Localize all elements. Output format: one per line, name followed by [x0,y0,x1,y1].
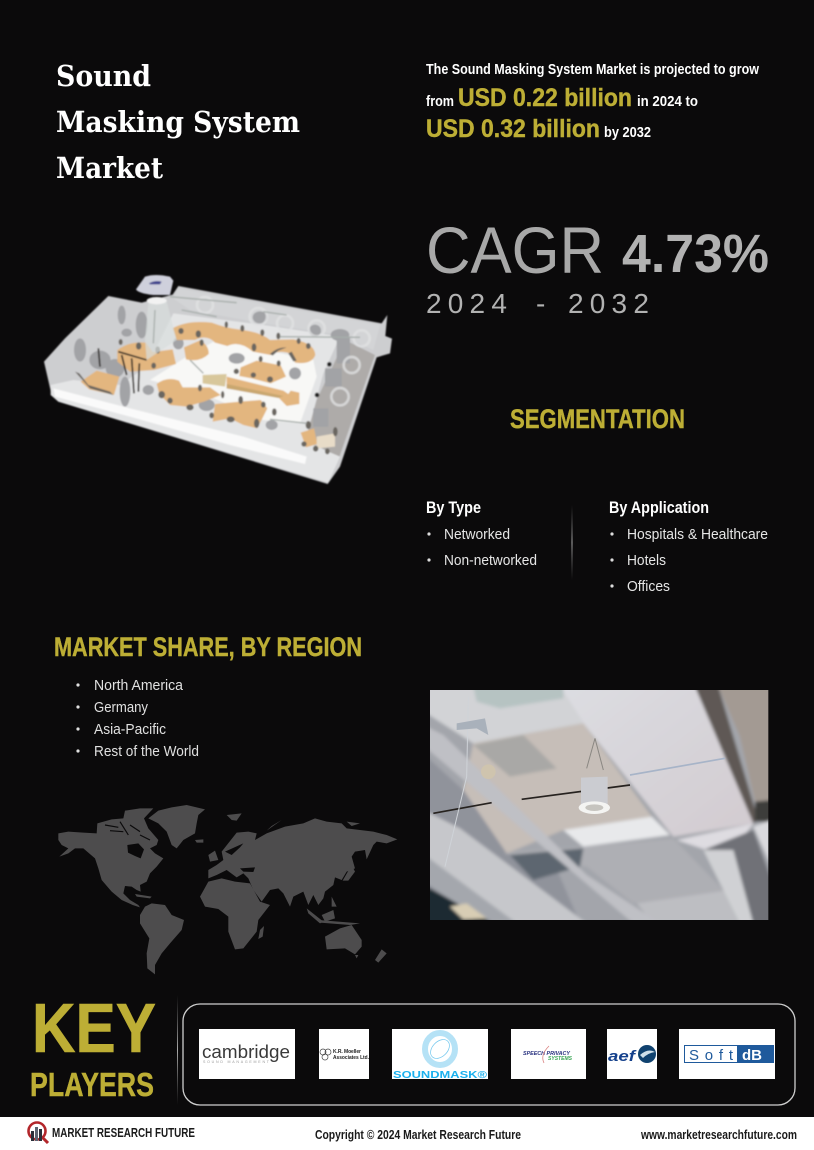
logo: soundmask [392,1029,488,1081]
logo: soft dB [679,1029,775,1079]
logo: aef: aef [608,1048,637,1065]
greenland [148,805,205,848]
walls [44,286,392,484]
logo: soft dB: Soft [689,1047,734,1064]
segment: by application: Hospitals & Healthcare [627,526,768,543]
segment: by application: Hotels [627,552,666,569]
CAGR block: 2032 [568,288,655,319]
title: Market [56,151,164,185]
title: Sound [56,59,151,93]
segment: by type [426,498,537,569]
market projection text [426,62,760,143]
logo: soft dB: dB [742,1047,762,1064]
CAGR block [426,213,769,319]
logo: K.R. Moeller [319,1029,370,1079]
world map [58,805,397,974]
segment: by type: Non-networked [444,552,537,569]
market projection text: USD 0.32 billion [426,115,600,143]
CAGR block: 2024 [426,288,513,319]
key players panel [183,1004,795,1105]
CAGR block: CAGR [426,213,604,287]
sound beam and speaker device [145,302,177,360]
market projection text: from [426,94,454,110]
CAGR block: - [536,288,545,319]
logo: cambridge: SOUND MANAGEMENT [203,1060,270,1064]
segment: by application: By Application [609,498,709,517]
footer: Copyright © 2024 Market Research Future [315,1128,521,1142]
desks [81,322,335,448]
key players heading: PLAYERS [30,1066,154,1103]
footer [0,1117,814,1150]
key players heading: KEY [32,989,156,1067]
region list: Germany [94,699,148,716]
market projection text: in 2024 to [637,94,698,110]
key players heading [30,989,156,1103]
logo: speech privacy systems: SYSTEMS [548,1056,572,1062]
CAGR block: 4.73% [622,224,769,284]
segment: by application: Offices [627,578,670,595]
logo: cambridge [199,1029,295,1079]
segment: by type: By Type [426,498,481,517]
region list: North America [94,677,184,694]
segment: by type: Networked [444,526,510,543]
logo: speech privacy systems [511,1029,586,1079]
logo: K.R. Moeller: K.R. Moeller [333,1049,361,1055]
market projection text: by 2032 [604,125,651,141]
uk [208,851,218,862]
title [56,59,300,185]
market share heading: MARKET SHARE, BY REGION [54,632,362,662]
logo: speech privacy systems: SPEECH PRIVACY [523,1051,571,1057]
segment: by application [609,498,768,595]
north america [58,808,163,907]
eurasia [208,818,397,907]
dark partition [98,348,147,393]
illustration: office floor plan [44,275,392,484]
logo: aef [607,1029,657,1079]
wall patches [74,306,350,430]
logo: soundmask: SOUNDMASK® [393,1069,487,1081]
title: Masking System [56,105,300,139]
logo: K.R. Moeller: Associates Ltd. [333,1055,370,1061]
footer: MARKET RESEARCH FUTURE [52,1126,195,1140]
region list: Asia-Pacific [94,721,166,738]
logo: cambridge: cambridge [202,1041,290,1062]
chairs [75,321,338,454]
south america [140,903,184,974]
segmentation heading: SEGMENTATION [510,404,685,434]
market projection text: The Sound Masking System Market is projected to grow [426,62,760,78]
icon: magnifier logo [28,1122,48,1143]
australia [325,925,362,954]
africa [200,878,270,949]
floor [51,313,340,483]
region list [76,677,199,760]
region list: Rest of the World [94,743,199,760]
market projection text: USD 0.22 billion [458,84,632,112]
southeast asia [307,908,323,923]
photo: ceiling speaker [427,687,772,923]
